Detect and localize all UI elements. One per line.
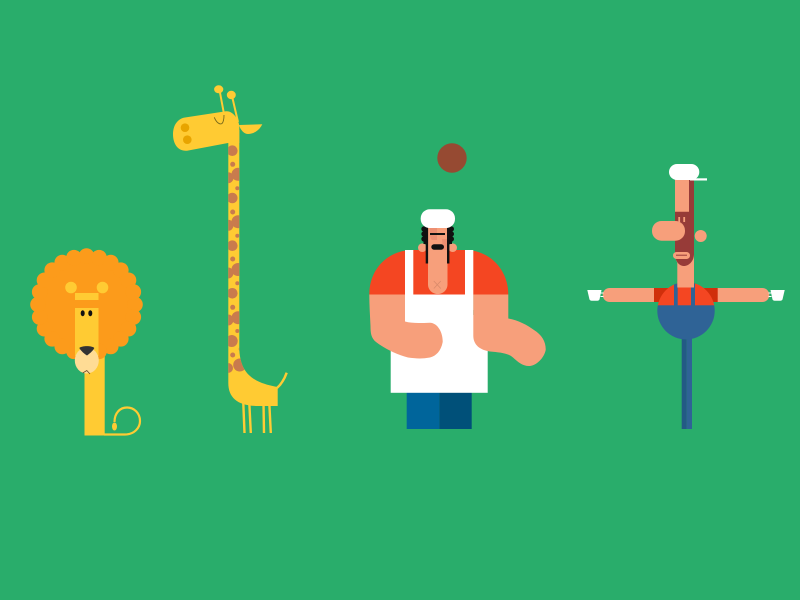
barista hat	[669, 164, 707, 180]
ball	[437, 143, 467, 173]
giraffe eye	[214, 115, 224, 124]
barista nose	[652, 221, 685, 241]
left coffee cup	[587, 290, 604, 301]
barista arms	[603, 288, 769, 302]
barista head	[675, 176, 694, 266]
chef hat	[421, 209, 455, 228]
barista leg	[682, 334, 692, 429]
chef face	[428, 226, 448, 294]
chef moustache	[431, 244, 444, 250]
chef right arm	[473, 294, 546, 366]
barista mouth	[673, 252, 690, 259]
chef ears	[418, 243, 457, 252]
barista body	[657, 283, 715, 340]
chef face shadow	[430, 228, 448, 250]
chef apron	[391, 250, 488, 393]
barista sleeves	[654, 288, 718, 302]
giraffe ear	[239, 124, 262, 134]
lion body	[84, 350, 105, 436]
barista beard	[675, 176, 694, 266]
lion eyes	[81, 310, 92, 316]
giraffe horns	[214, 85, 238, 122]
lion mane	[30, 248, 143, 361]
giraffe legs	[243, 403, 271, 433]
chef sideburns	[426, 228, 449, 264]
lion face	[75, 308, 98, 356]
barista	[587, 164, 785, 429]
giraffe nostrils	[181, 123, 192, 144]
barista ear	[695, 230, 707, 242]
lion	[30, 248, 143, 436]
giraffe head	[173, 111, 239, 151]
lion muzzle	[75, 348, 99, 374]
lion ears and forehead	[65, 282, 108, 300]
giraffe tail	[277, 373, 287, 388]
lion mouth	[83, 370, 90, 374]
lion tail	[104, 408, 140, 434]
giraffe	[173, 85, 287, 433]
giraffe neck and body	[228, 130, 278, 406]
chef hair	[421, 226, 454, 244]
chef trousers	[407, 392, 472, 429]
chef left arm	[369, 294, 443, 358]
chef	[369, 209, 546, 429]
lion nose	[79, 346, 94, 356]
barista neck	[677, 255, 694, 288]
right coffee cup	[768, 290, 785, 301]
chef shirt	[369, 250, 508, 294]
chef chin mark	[434, 281, 441, 288]
giraffe spots	[228, 140, 244, 373]
chef eyebrow	[430, 233, 445, 235]
barista teeth	[678, 217, 685, 222]
